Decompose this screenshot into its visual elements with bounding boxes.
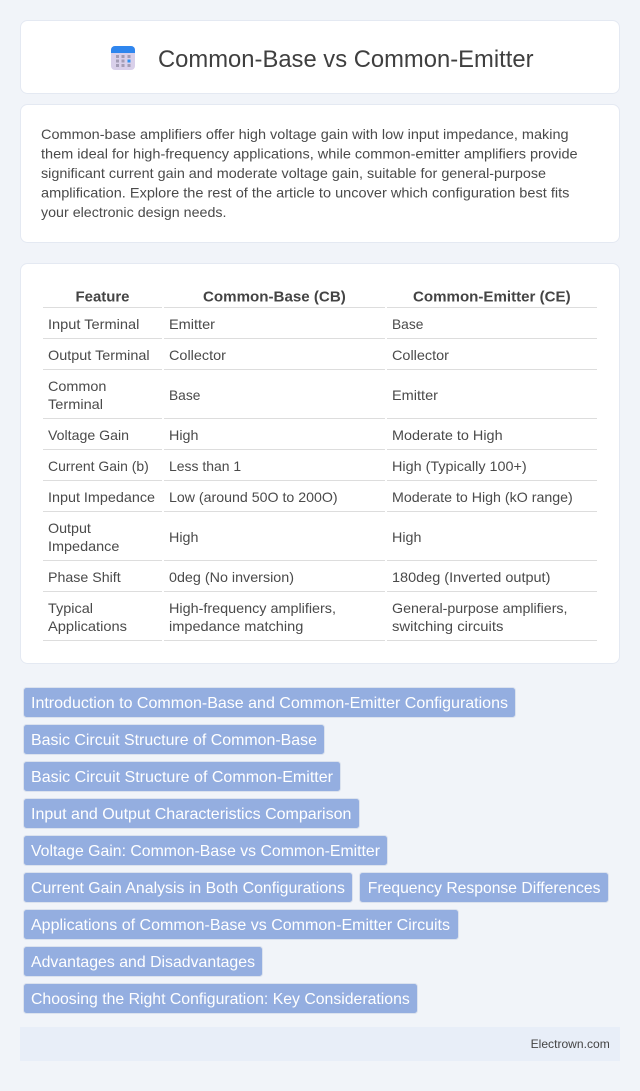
tag: choosing [24, 984, 418, 1014]
row: input impedance: Moderate to High (kO range) [392, 489, 573, 505]
row: common terminal [48, 378, 438, 412]
row: output terminal [48, 347, 449, 363]
tag: voltage gain [24, 836, 388, 866]
table header row: Feature [76, 288, 130, 306]
row: typical applications: impedance matching [169, 618, 303, 634]
footer [20, 1027, 620, 1061]
row: common terminal: Common [48, 378, 106, 394]
row: output impedance [48, 520, 421, 554]
row: output impedance: High [392, 529, 421, 545]
panel: topic tags [24, 688, 608, 1014]
row: current gain: High (Typically 100+) [392, 458, 527, 474]
row: current gain: Current Gain (b) [48, 458, 149, 474]
row: input impedance [48, 489, 573, 505]
tag: current gain: Current Gain Analysis in Both Configurations [31, 880, 345, 897]
tag: applications [24, 910, 458, 940]
table header row: Common-Base (CB) [203, 288, 346, 306]
tag: common-emitter structure [24, 762, 340, 792]
row: output terminal: Collector [169, 347, 226, 363]
tag: frequency response: Frequency Response Differences [368, 880, 600, 897]
row: input impedance: Input Impedance [48, 489, 155, 505]
text block: summary [41, 126, 578, 220]
row: voltage gain: Moderate to High [392, 427, 503, 443]
row: common terminal: Emitter [392, 387, 438, 403]
tag: common-emitter structure: Basic Circuit Structure of Common-Emitter [31, 769, 334, 786]
row: typical applications: Applications [48, 618, 127, 634]
tag: characteristics: Input and Output Characteristics Comparison [31, 806, 351, 823]
row: input terminal: Input Terminal [48, 316, 139, 332]
panel: comparison table [20, 264, 620, 664]
row: current gain [48, 458, 527, 474]
text block: summary: them ideal for high-frequency applications, while common-emitter amplifiers provide [41, 146, 578, 162]
table header row: Common-Emitter (CE) [413, 288, 571, 306]
row: voltage gain: High [169, 427, 198, 443]
row: typical applications: Typical [48, 600, 93, 616]
footer: Electrown.com [531, 1037, 610, 1051]
tag: choosing: Choosing the Right Configuration: Key Considerations [31, 991, 410, 1008]
text block: summary: amplification. Explore the rest of the article to uncover which configuration best fits [41, 184, 569, 200]
row: typical applications: General-purpose amplifiers, [392, 600, 568, 616]
row: phase shift: Phase Shift [48, 569, 121, 585]
tag: common-base structure: Basic Circuit Structure of Common-Base [31, 732, 317, 749]
panel: description [20, 104, 620, 242]
panel: header [20, 20, 620, 94]
text block: summary: significant current gain and moderate voltage gain, suitable for general-purpose [41, 165, 546, 181]
icon: calendar grid [111, 46, 135, 70]
row: typical applications [48, 600, 568, 634]
tag: applications: Applications of Common-Base vs Common-Emitter Circuits [31, 917, 450, 934]
row: input terminal: Emitter [169, 316, 215, 332]
row: output impedance: Output [48, 520, 91, 536]
text block: summary: your electronic design needs. [41, 204, 226, 220]
row: typical applications: High-frequency amplifiers, [169, 600, 336, 616]
row: output impedance: High [169, 529, 198, 545]
row: common terminal: Terminal [48, 396, 103, 412]
table header row [76, 288, 571, 306]
tag: voltage gain: Voltage Gain: Common-Base vs Common-Emitter [31, 843, 381, 860]
row: phase shift [48, 569, 550, 585]
row: current gain: Less than 1 [169, 458, 241, 474]
row: input terminal [48, 316, 424, 332]
row: voltage gain [48, 427, 503, 443]
text block: summary: Common-base amplifiers offer high voltage gain with low input impedance, making [41, 126, 569, 142]
tag: current gain [24, 872, 352, 902]
tag: introduction [24, 688, 516, 718]
tag: advantages: Advantages and Disadvantages [31, 954, 255, 971]
tag: common-base structure [24, 724, 324, 754]
row: input impedance: Low (around 50O to 200O) [169, 489, 338, 505]
row: voltage gain: Voltage Gain [48, 427, 129, 443]
row: typical applications: switching circuits [392, 618, 503, 634]
tag: frequency response [360, 872, 608, 902]
row: phase shift: 0deg (No inversion) [169, 569, 294, 585]
row: output terminal: Collector [392, 347, 449, 363]
row: phase shift: 180deg (Inverted output) [392, 569, 550, 585]
tag: advantages [24, 946, 262, 976]
row: output impedance: Impedance [48, 538, 120, 554]
row: input terminal: Base [392, 316, 424, 332]
row: output terminal: Output Terminal [48, 347, 150, 363]
title: Common-Base vs Common-Emitter [158, 46, 534, 73]
tag: characteristics [24, 798, 360, 828]
row: common terminal: Base [169, 387, 201, 403]
tag: introduction: Introduction to Common-Base and Common-Emitter Configurations [31, 695, 508, 712]
